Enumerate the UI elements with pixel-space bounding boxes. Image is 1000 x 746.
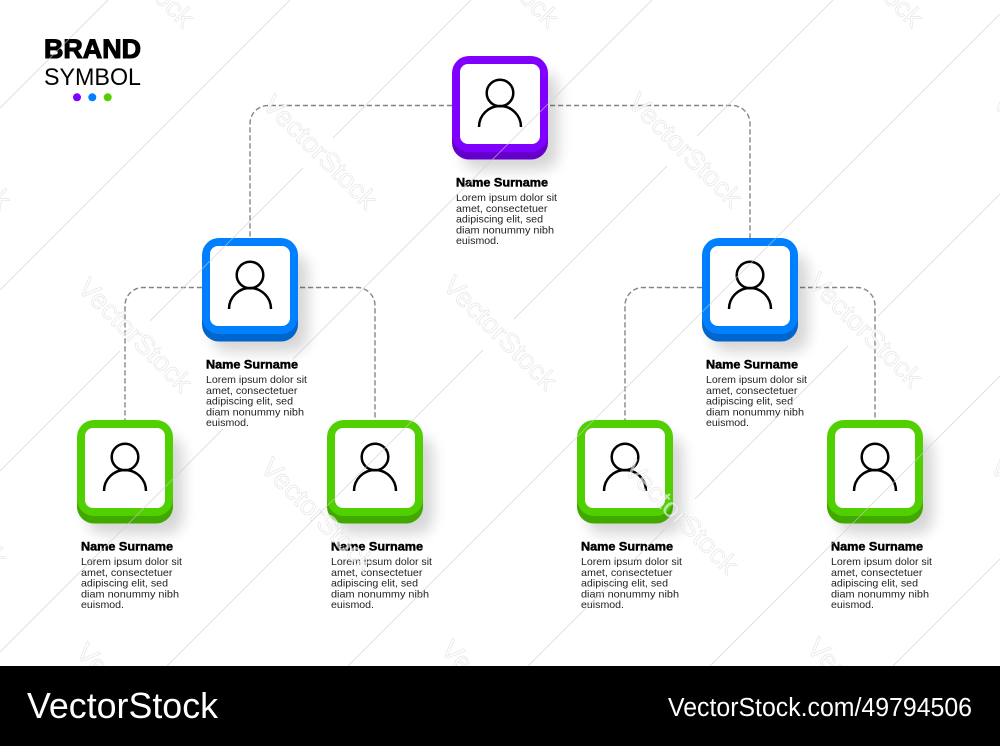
description: adipiscing elit, sed [706, 396, 793, 408]
node: right manager [702, 238, 808, 429]
name: Name Surname [331, 542, 423, 554]
description: Lorem ipsum dolor sit [81, 556, 182, 568]
description: adipiscing elit, sed [581, 578, 668, 590]
description: Lorem ipsum dolor sit [456, 192, 557, 204]
watermark text: VectorStock [257, 89, 383, 215]
watermark text: VectorStock [72, 272, 198, 398]
footer band [0, 666, 1000, 746]
description: Lorem ipsum dolor sit [206, 374, 307, 386]
description: euismod. [706, 417, 749, 429]
node: top manager [452, 56, 558, 247]
watermark text: VectorStock [618, 454, 744, 580]
description: diam nonummy nibh [81, 588, 179, 600]
watermark text: VectorStock [437, 270, 563, 396]
description: amet, consectetuer [831, 567, 923, 579]
description: euismod. [331, 599, 374, 611]
node: team member 2 [327, 420, 433, 611]
green card [77, 420, 183, 534]
watermark text: VectorStock [622, 87, 748, 213]
green card [327, 420, 433, 534]
dashed connectors [125, 106, 875, 420]
description: euismod. [206, 417, 249, 429]
green card [827, 420, 933, 534]
description: diam nonummy nibh [706, 406, 804, 418]
description: Lorem ipsum dolor sit [831, 556, 932, 568]
name: Name Surname [831, 542, 923, 554]
description: diam nonummy nibh [581, 588, 679, 600]
icon: person [604, 444, 646, 491]
icon: person [104, 444, 146, 491]
purple card [452, 56, 558, 170]
description: amet, consectetuer [331, 567, 423, 579]
description: diam nonummy nibh [331, 588, 429, 600]
icon: person [479, 80, 521, 127]
description: diam nonummy nibh [831, 588, 929, 600]
blue card [702, 238, 808, 352]
icon: person [854, 444, 896, 491]
node: team member 4 [827, 420, 933, 611]
footer band: VectorStock [27, 685, 219, 726]
description: adipiscing elit, sed [206, 396, 293, 408]
description: adipiscing elit, sed [831, 578, 918, 590]
description [456, 192, 557, 247]
name: Name Surname [456, 178, 548, 190]
description [831, 556, 932, 611]
description: adipiscing elit, sed [331, 578, 418, 590]
description [81, 556, 182, 611]
description: amet, consectetuer [581, 567, 673, 579]
name: Name Surname [81, 542, 173, 554]
description: amet, consectetuer [456, 203, 548, 215]
description: Lorem ipsum dolor sit [706, 374, 807, 386]
description: Lorem ipsum dolor sit [331, 556, 432, 568]
blue card [202, 238, 308, 352]
green card [577, 420, 683, 534]
description: euismod. [581, 599, 624, 611]
footer band: VectorStock.com/49794506 [668, 694, 972, 722]
watermark text: VectorStock [255, 452, 381, 578]
name: Name Surname [706, 360, 798, 372]
watermark text: VectorStock [802, 267, 928, 393]
node: left manager [202, 238, 308, 429]
node: team member 3 [577, 420, 683, 611]
brand logo: BRAND [44, 34, 141, 64]
icon: person [729, 262, 771, 309]
description [706, 374, 807, 429]
description [206, 374, 307, 429]
description: euismod. [456, 235, 499, 247]
node: team member 1 [77, 420, 183, 611]
description: diam nonummy nibh [456, 224, 554, 236]
brand logo [44, 34, 141, 101]
description [331, 556, 432, 611]
description: amet, consectetuer [81, 567, 173, 579]
name: Name Surname [206, 360, 298, 372]
icon: person [354, 444, 396, 491]
description: euismod. [81, 599, 124, 611]
name: Name Surname [581, 542, 673, 554]
description: Lorem ipsum dolor sit [581, 556, 682, 568]
description: adipiscing elit, sed [456, 214, 543, 226]
description: amet, consectetuer [206, 385, 298, 397]
description: diam nonummy nibh [206, 406, 304, 418]
description: amet, consectetuer [706, 385, 798, 397]
brand logo: SYMBOL [44, 64, 141, 91]
description [581, 556, 682, 611]
description: adipiscing elit, sed [81, 578, 168, 590]
description: euismod. [831, 599, 874, 611]
icon: person [229, 262, 271, 309]
